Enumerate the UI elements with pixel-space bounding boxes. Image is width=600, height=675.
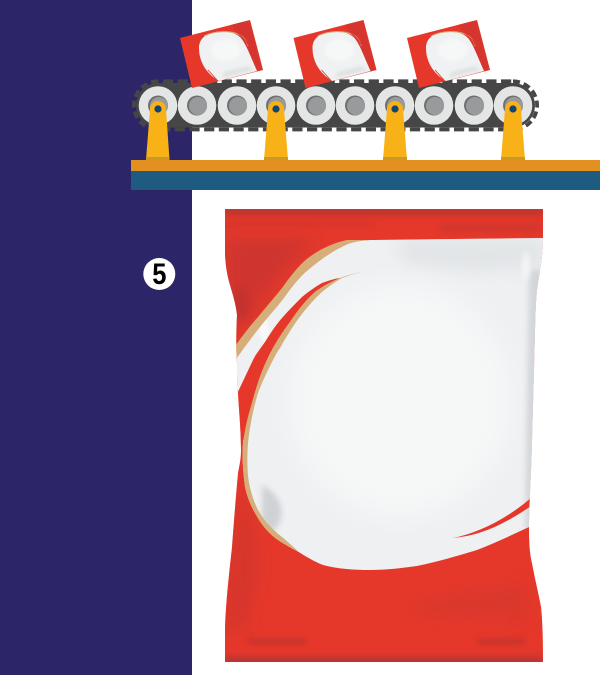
step number badge [143,257,175,290]
red right swoosh [453,498,531,538]
tan left swoosh [243,271,365,551]
small bag on conveyor 2 [294,20,376,88]
white panel [236,238,545,570]
yellow support 2 [264,101,288,160]
step number badge: 5 [152,257,166,290]
navy side panel [0,0,192,675]
small bag on conveyor 3 [407,20,490,88]
tan curved band [236,240,373,359]
conveyor belt [134,81,537,130]
large snack bag [220,205,550,666]
red left swoosh [236,278,340,450]
yellow support 1 [146,101,170,160]
conveyor machine [131,81,600,190]
blue base bar [131,171,600,190]
rollers [139,86,532,125]
red bag body [220,205,550,665]
yellow support 3 [383,101,407,160]
small bag on conveyor 1 [180,20,263,88]
white panel shading [259,238,545,532]
bag top seal shading [225,207,543,335]
bag lower shading [225,498,543,662]
orange platform bar [131,160,600,171]
yellow support 4 [501,101,525,160]
